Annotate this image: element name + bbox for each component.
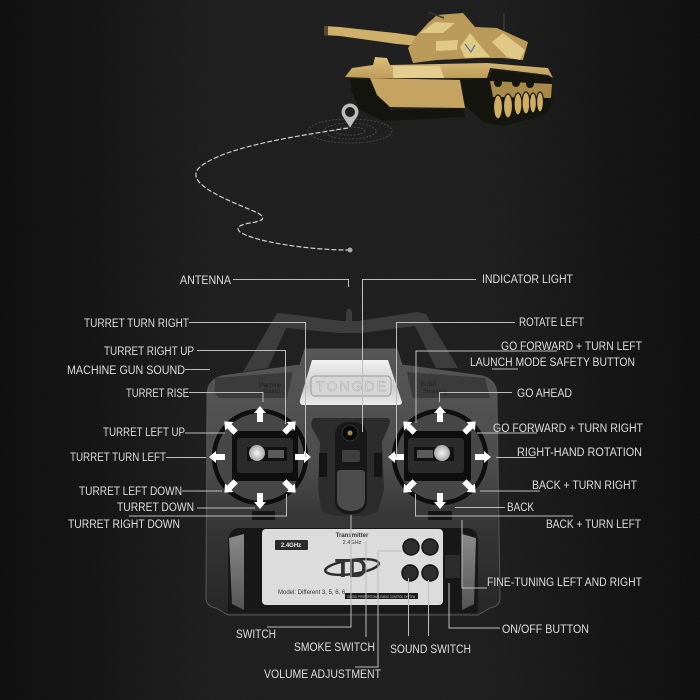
- left recess highlight: [229, 534, 244, 610]
- frequency text: 2.4GHz: [281, 543, 301, 549]
- return rollers: [494, 79, 534, 88]
- left stick arrows: [209, 406, 311, 509]
- model text: Model: Different 3, 5, 6, 6: [278, 590, 346, 596]
- frequency badge: [275, 540, 308, 550]
- sound label: Sound: [262, 389, 280, 395]
- machine sound label: Machine: [259, 383, 282, 389]
- label: smoke switch: SMOKE SWITCH: [294, 642, 375, 654]
- location pin icon: [341, 103, 358, 128]
- black strip: [345, 593, 418, 599]
- antenna: [343, 308, 356, 352]
- label: turret right down: TURRET RIGHT DOWN: [68, 519, 180, 531]
- label: go ahead: GO AHEAD: [517, 388, 572, 400]
- label: turret down: TURRET DOWN: [117, 502, 194, 514]
- shooting label: Shooting: [423, 389, 447, 395]
- hull side strip: [490, 81, 552, 98]
- lower right trim: [428, 511, 452, 520]
- label: right-hand rotation: RIGHT-HAND ROTATION: [517, 447, 642, 459]
- right gimbal slot: [414, 447, 454, 461]
- label: back + turn left: BACK + TURN LEFT: [546, 519, 641, 531]
- right stick arrows: [388, 406, 491, 509]
- label: back: BACK: [507, 502, 534, 514]
- leader lines: [129, 280, 573, 667]
- label: rotate left: ROTATE LEFT: [519, 317, 584, 329]
- right trim: [374, 453, 382, 477]
- label: sound switch: SOUND SWITCH: [390, 644, 471, 656]
- indicator column: [335, 422, 367, 514]
- label: go forward + turn right: GO FORWARD + TURN RIGHT: [493, 423, 643, 435]
- route dashed path: [196, 128, 348, 250]
- label: volume adjustment: VOLUME ADJUSTMENT: [264, 669, 381, 681]
- right stick ring: [394, 411, 486, 503]
- on/off switch: [445, 555, 460, 578]
- road wheels: [494, 92, 544, 119]
- transmitter text: Transmitter: [336, 533, 369, 539]
- label: switch: SWITCH: [236, 629, 276, 641]
- label: indicator light: INDICATOR LIGHT: [482, 274, 573, 286]
- left stick ring: [214, 411, 306, 503]
- brand text: TONGDE: [316, 378, 386, 394]
- bullet label: Bullet: [421, 382, 436, 388]
- left trim: [319, 453, 327, 477]
- right gimbal track: [417, 450, 433, 458]
- route end dot: [348, 248, 352, 252]
- label: on/off button: ON/OFF BUTTON: [502, 624, 589, 636]
- left stick knob: [249, 445, 265, 461]
- centre slider: [337, 470, 365, 511]
- left badge panel: [215, 372, 293, 398]
- turret: [408, 13, 528, 63]
- centre button: [342, 450, 360, 462]
- barrel: [324, 26, 433, 47]
- centre console: [311, 418, 390, 516]
- right gimbal: [404, 431, 471, 481]
- label: back + turn right: BACK + TURN RIGHT: [532, 480, 637, 492]
- label: turret left up: TURRET LEFT UP: [103, 427, 185, 439]
- right recess highlight: [462, 534, 476, 610]
- chevron marking: [465, 44, 475, 52]
- brand logo letters: TD: [335, 553, 367, 583]
- turret plates: [420, 22, 525, 60]
- bottom labels: [236, 629, 471, 681]
- lower left trim: [252, 511, 275, 520]
- label: go forward + turn left: GO FORWARD + TURN LEFT: [501, 341, 642, 353]
- label: turret rise: TURRET RISE: [126, 388, 189, 400]
- front track: [350, 78, 465, 121]
- label: launch mode safety button: LAUNCH MODE SAFETY BUTTON: [470, 357, 635, 369]
- carry handle: [243, 312, 458, 372]
- function knobs: [402, 539, 438, 581]
- left gimbal inner: [237, 438, 293, 473]
- strip text: DIGITAL PROPORTIONAL RADIO CONTROL SYSTEM: [347, 594, 415, 599]
- right badge panel: [407, 372, 490, 398]
- controller body: [206, 349, 500, 615]
- transmitter: [206, 308, 500, 615]
- left labels: [67, 275, 231, 531]
- transmitter frequency text: 2.4GHz: [343, 540, 362, 546]
- brand logo ring: [324, 556, 380, 578]
- muzzle tip: [324, 26, 328, 35]
- left gimbal: [232, 431, 298, 481]
- brand nameplate: [311, 376, 391, 396]
- label: machine gun sound: MACHINE GUN SOUND: [67, 365, 185, 377]
- white label panel: [262, 529, 443, 605]
- mudguard plate: [393, 66, 444, 78]
- handle opening: [262, 326, 440, 370]
- left gimbal slot: [247, 447, 287, 461]
- label: turret right up: TURRET RIGHT UP: [104, 346, 194, 358]
- right labels: [470, 274, 643, 636]
- rear track: [460, 70, 553, 126]
- tank illustration: [324, 12, 553, 126]
- label: turret turn left: TURRET TURN LEFT: [70, 452, 166, 464]
- indicator lens: [342, 425, 358, 441]
- left gimbal track: [268, 450, 284, 458]
- hull deck: [345, 57, 553, 78]
- label: antenna: ANTENNA: [180, 275, 231, 287]
- silver brand plate: [300, 360, 402, 405]
- label: turret turn right: TURRET TURN RIGHT: [84, 318, 189, 330]
- right stick knob: [434, 445, 450, 461]
- lower recess: [228, 528, 478, 613]
- label: fine-tuning: FINE-TUNING LEFT AND RIGHT: [487, 577, 642, 589]
- lower hull: [370, 78, 465, 108]
- turret aerial: [428, 12, 504, 30]
- route marker ripples: [308, 119, 392, 143]
- right gimbal inner: [408, 438, 464, 473]
- label: turret left down: TURRET LEFT DOWN: [79, 486, 182, 498]
- indicator light: [348, 430, 352, 436]
